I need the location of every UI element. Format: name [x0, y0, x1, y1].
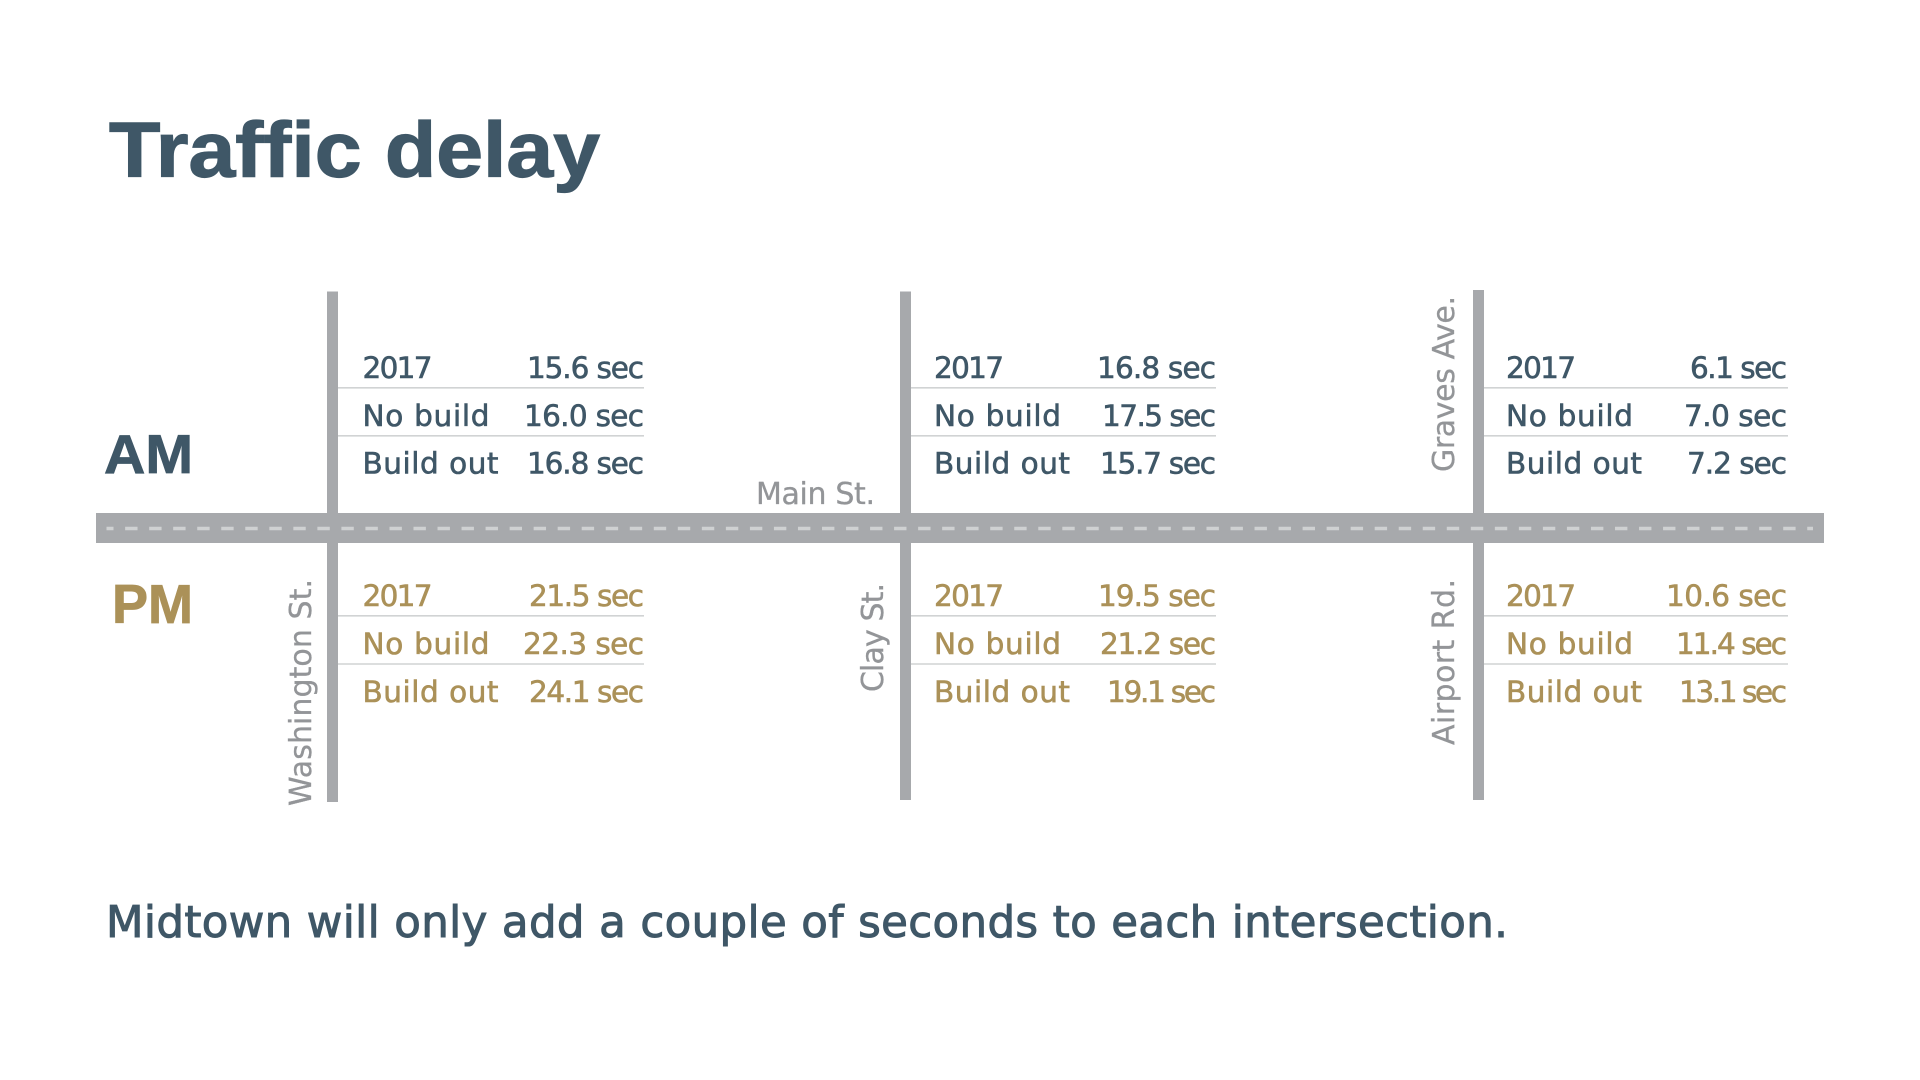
panel: PM Washington St.: No build: [362, 627, 490, 661]
takeaway text: Midtown will only add a couple of seconds to each intersection.: [106, 898, 1508, 948]
street label: Main St.: Main St.: [756, 477, 875, 512]
road: Clay St.: [900, 292, 911, 800]
panel: PM Clay St.: 21.2 sec: [1100, 627, 1216, 661]
panel: PM Clay St.: 2017: [934, 579, 1004, 613]
panel: AM Clay St.: 15.7 sec: [1100, 446, 1216, 480]
panel: PM Airport Rd.: Build out: [1506, 675, 1642, 709]
panel: PM Airport Rd.: 13.1 sec: [1679, 675, 1787, 709]
panel: PM Washington St.: 2017: [362, 579, 432, 613]
panel: AM Graves Ave.: [1484, 351, 1788, 480]
panel: AM Graves Ave.: No build: [1506, 399, 1633, 433]
panel: PM Washington St.: 22.3 sec: [523, 627, 644, 661]
panel: PM Clay St.: 19.5 sec: [1098, 579, 1216, 613]
title: Traffic delay: [109, 106, 600, 194]
panel: AM Washington St.: Build out: [362, 446, 498, 480]
road: Main St.: [96, 513, 1824, 543]
panel: PM Airport Rd.: 2017: [1506, 579, 1576, 613]
panel: PM Washington St.: [338, 579, 644, 709]
panel: AM Washington St.: 16.0 sec: [524, 399, 644, 433]
panel: AM Graves Ave.: 2017: [1506, 351, 1576, 385]
panel: PM Airport Rd.: [1484, 579, 1788, 709]
panel: PM Airport Rd.: 10.6 sec: [1666, 579, 1787, 613]
panel: AM Clay St.: 2017: [934, 351, 1004, 385]
panel: AM Clay St.: Build out: [934, 446, 1070, 480]
panel: PM Clay St.: No build: [934, 627, 1061, 661]
panel: PM Airport Rd.: 11.4 sec: [1676, 627, 1787, 661]
panel: AM Washington St.: No build: [362, 399, 490, 433]
panel: AM Washington St.: 16.8 sec: [527, 446, 644, 480]
panel: AM Clay St.: 17.5 sec: [1102, 399, 1216, 433]
panel: AM Washington St.: 2017: [362, 351, 432, 385]
panel: AM Washington St.: [338, 351, 644, 480]
panel: AM Clay St.: No build: [934, 399, 1061, 433]
panel: AM Graves Ave.: Build out: [1506, 446, 1642, 480]
panel: AM Graves Ave.: 7.0 sec: [1684, 399, 1787, 433]
road network: [96, 290, 1824, 802]
road: Washington St.: [327, 292, 338, 802]
street label: Graves Ave.: Graves Ave.: [1427, 296, 1462, 472]
label: AM: AM: [104, 423, 193, 485]
panel: PM Washington St.: 24.1 sec: [529, 675, 644, 709]
street label: Clay St.: Clay St.: [856, 583, 891, 692]
panel: PM Clay St.: 19.1 sec: [1107, 675, 1216, 709]
panel: AM Clay St.: [911, 351, 1216, 480]
road: Graves Ave. and Airport Rd.: [1473, 290, 1484, 800]
panel: PM Airport Rd.: No build: [1506, 627, 1633, 661]
street label: Washington St.: Washington St.: [284, 579, 319, 806]
panel: AM Clay St.: 16.8 sec: [1097, 351, 1216, 385]
panel: PM Washington St.: 21.5 sec: [529, 579, 644, 613]
panel: PM Washington St.: Build out: [362, 675, 498, 709]
street label: Airport Rd.: Airport Rd.: [1427, 579, 1462, 745]
panel: AM Graves Ave.: 7.2 sec: [1687, 446, 1787, 480]
panel: AM Graves Ave.: 6.1 sec: [1690, 351, 1787, 385]
panel: PM Clay St.: [911, 579, 1216, 709]
label: PM: PM: [112, 573, 193, 635]
panel: PM Clay St.: Build out: [934, 675, 1070, 709]
panel: AM Washington St.: 15.6 sec: [527, 351, 644, 385]
